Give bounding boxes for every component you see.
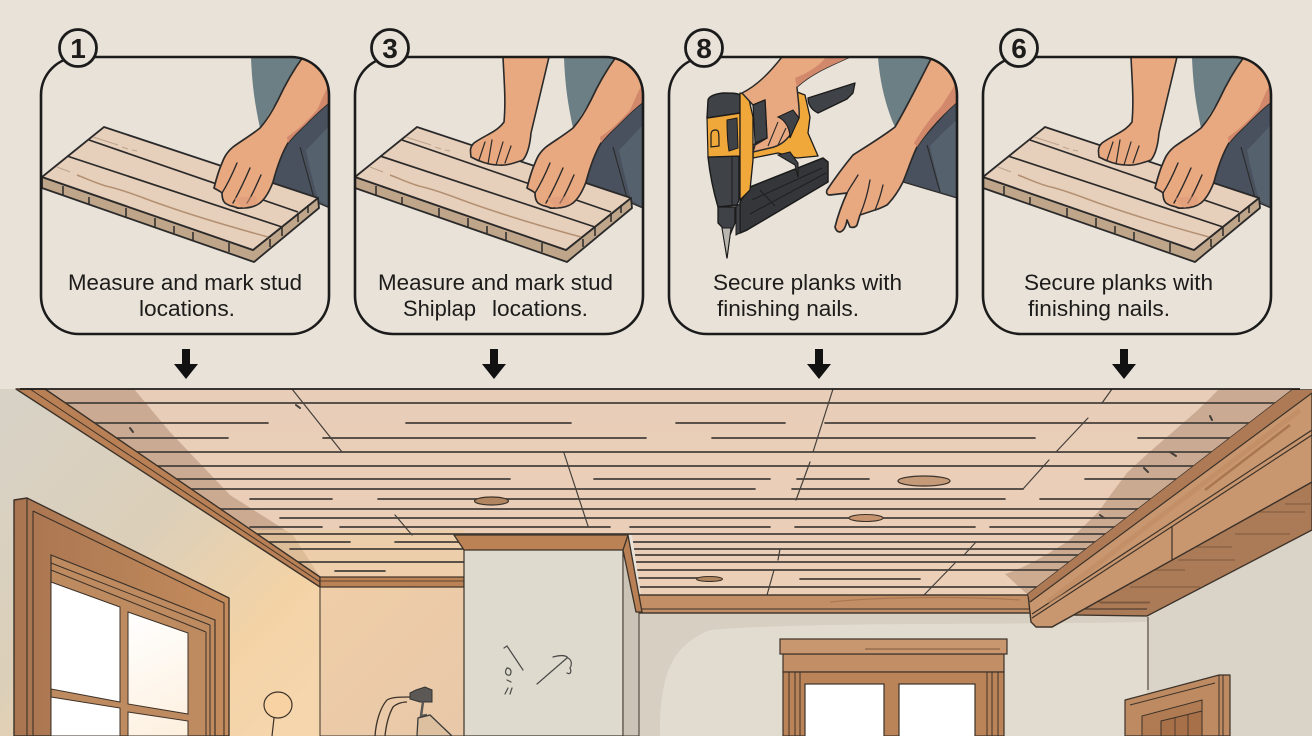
right window (780, 639, 1007, 736)
step number 1: 1 (70, 33, 86, 64)
arrow 3 (807, 349, 831, 379)
step number 6: 6 (1011, 33, 1027, 64)
caption: step 8: finishing nails. (717, 296, 859, 321)
tool: nail gun (707, 83, 855, 258)
arrow 2 (482, 349, 506, 379)
panel: step 8 secure with nailer (669, 30, 957, 334)
ceiling planks (0, 389, 1312, 597)
right wall (639, 530, 1312, 736)
caption: step 3 (378, 270, 613, 321)
step number 3: 3 (382, 33, 398, 64)
ceiling shadows (45, 389, 1296, 597)
caption: step 8 (713, 270, 902, 321)
left window (14, 498, 229, 736)
back wall (320, 587, 464, 736)
lamp (264, 692, 292, 736)
illustration: board and hand (42, 57, 330, 262)
caption: step 8: Secure planks with (713, 270, 902, 295)
caption: step 3: locations. (492, 296, 588, 321)
left wall (0, 389, 320, 736)
caption: step 1: locations. (139, 296, 235, 321)
plank seams (130, 389, 1212, 595)
step number 3 (372, 30, 408, 66)
step number 8 (686, 30, 722, 66)
hand: gripping nail gun (742, 57, 850, 152)
caption: step 6: finishing nails. (1028, 296, 1170, 321)
shirt and trousers (878, 57, 957, 198)
caption: step 6 (1024, 270, 1213, 321)
panel: step 6 secure planks (983, 30, 1271, 334)
pencil marks (504, 646, 571, 694)
step number 1 (60, 30, 96, 66)
door (1125, 675, 1230, 736)
caption: step 6: Secure planks with (1024, 270, 1213, 295)
step number 8: 8 (696, 33, 712, 64)
beam (1028, 390, 1312, 627)
caption: step 3: Measure and mark stud (378, 270, 613, 295)
column (454, 535, 642, 736)
illustration: board and two hands (983, 57, 1271, 262)
panel: step 3 measure and mark (355, 30, 643, 334)
illustration: board and two hands (355, 57, 643, 262)
left crown molding (16, 389, 464, 587)
step number 6 (1000, 30, 1038, 66)
plank lines (0, 403, 1312, 587)
window panes (51, 582, 188, 736)
ceiling top edge (20, 388, 1300, 390)
room scene (0, 389, 1312, 736)
wall tool and cord (375, 687, 452, 736)
window panes (805, 684, 975, 736)
caption: step 3: Shiplap (403, 296, 476, 321)
panel: step 1 measure and mark (41, 30, 330, 334)
right crown molding (639, 595, 1032, 613)
arrow 4 (1112, 349, 1136, 379)
caption: step 1 (68, 270, 302, 321)
hand: resting hand (827, 57, 957, 232)
column cap molding (454, 535, 628, 550)
arrow 1 (174, 349, 198, 379)
knot holes (474, 476, 950, 582)
caption: step 1: Measure and mark stud (68, 270, 302, 295)
